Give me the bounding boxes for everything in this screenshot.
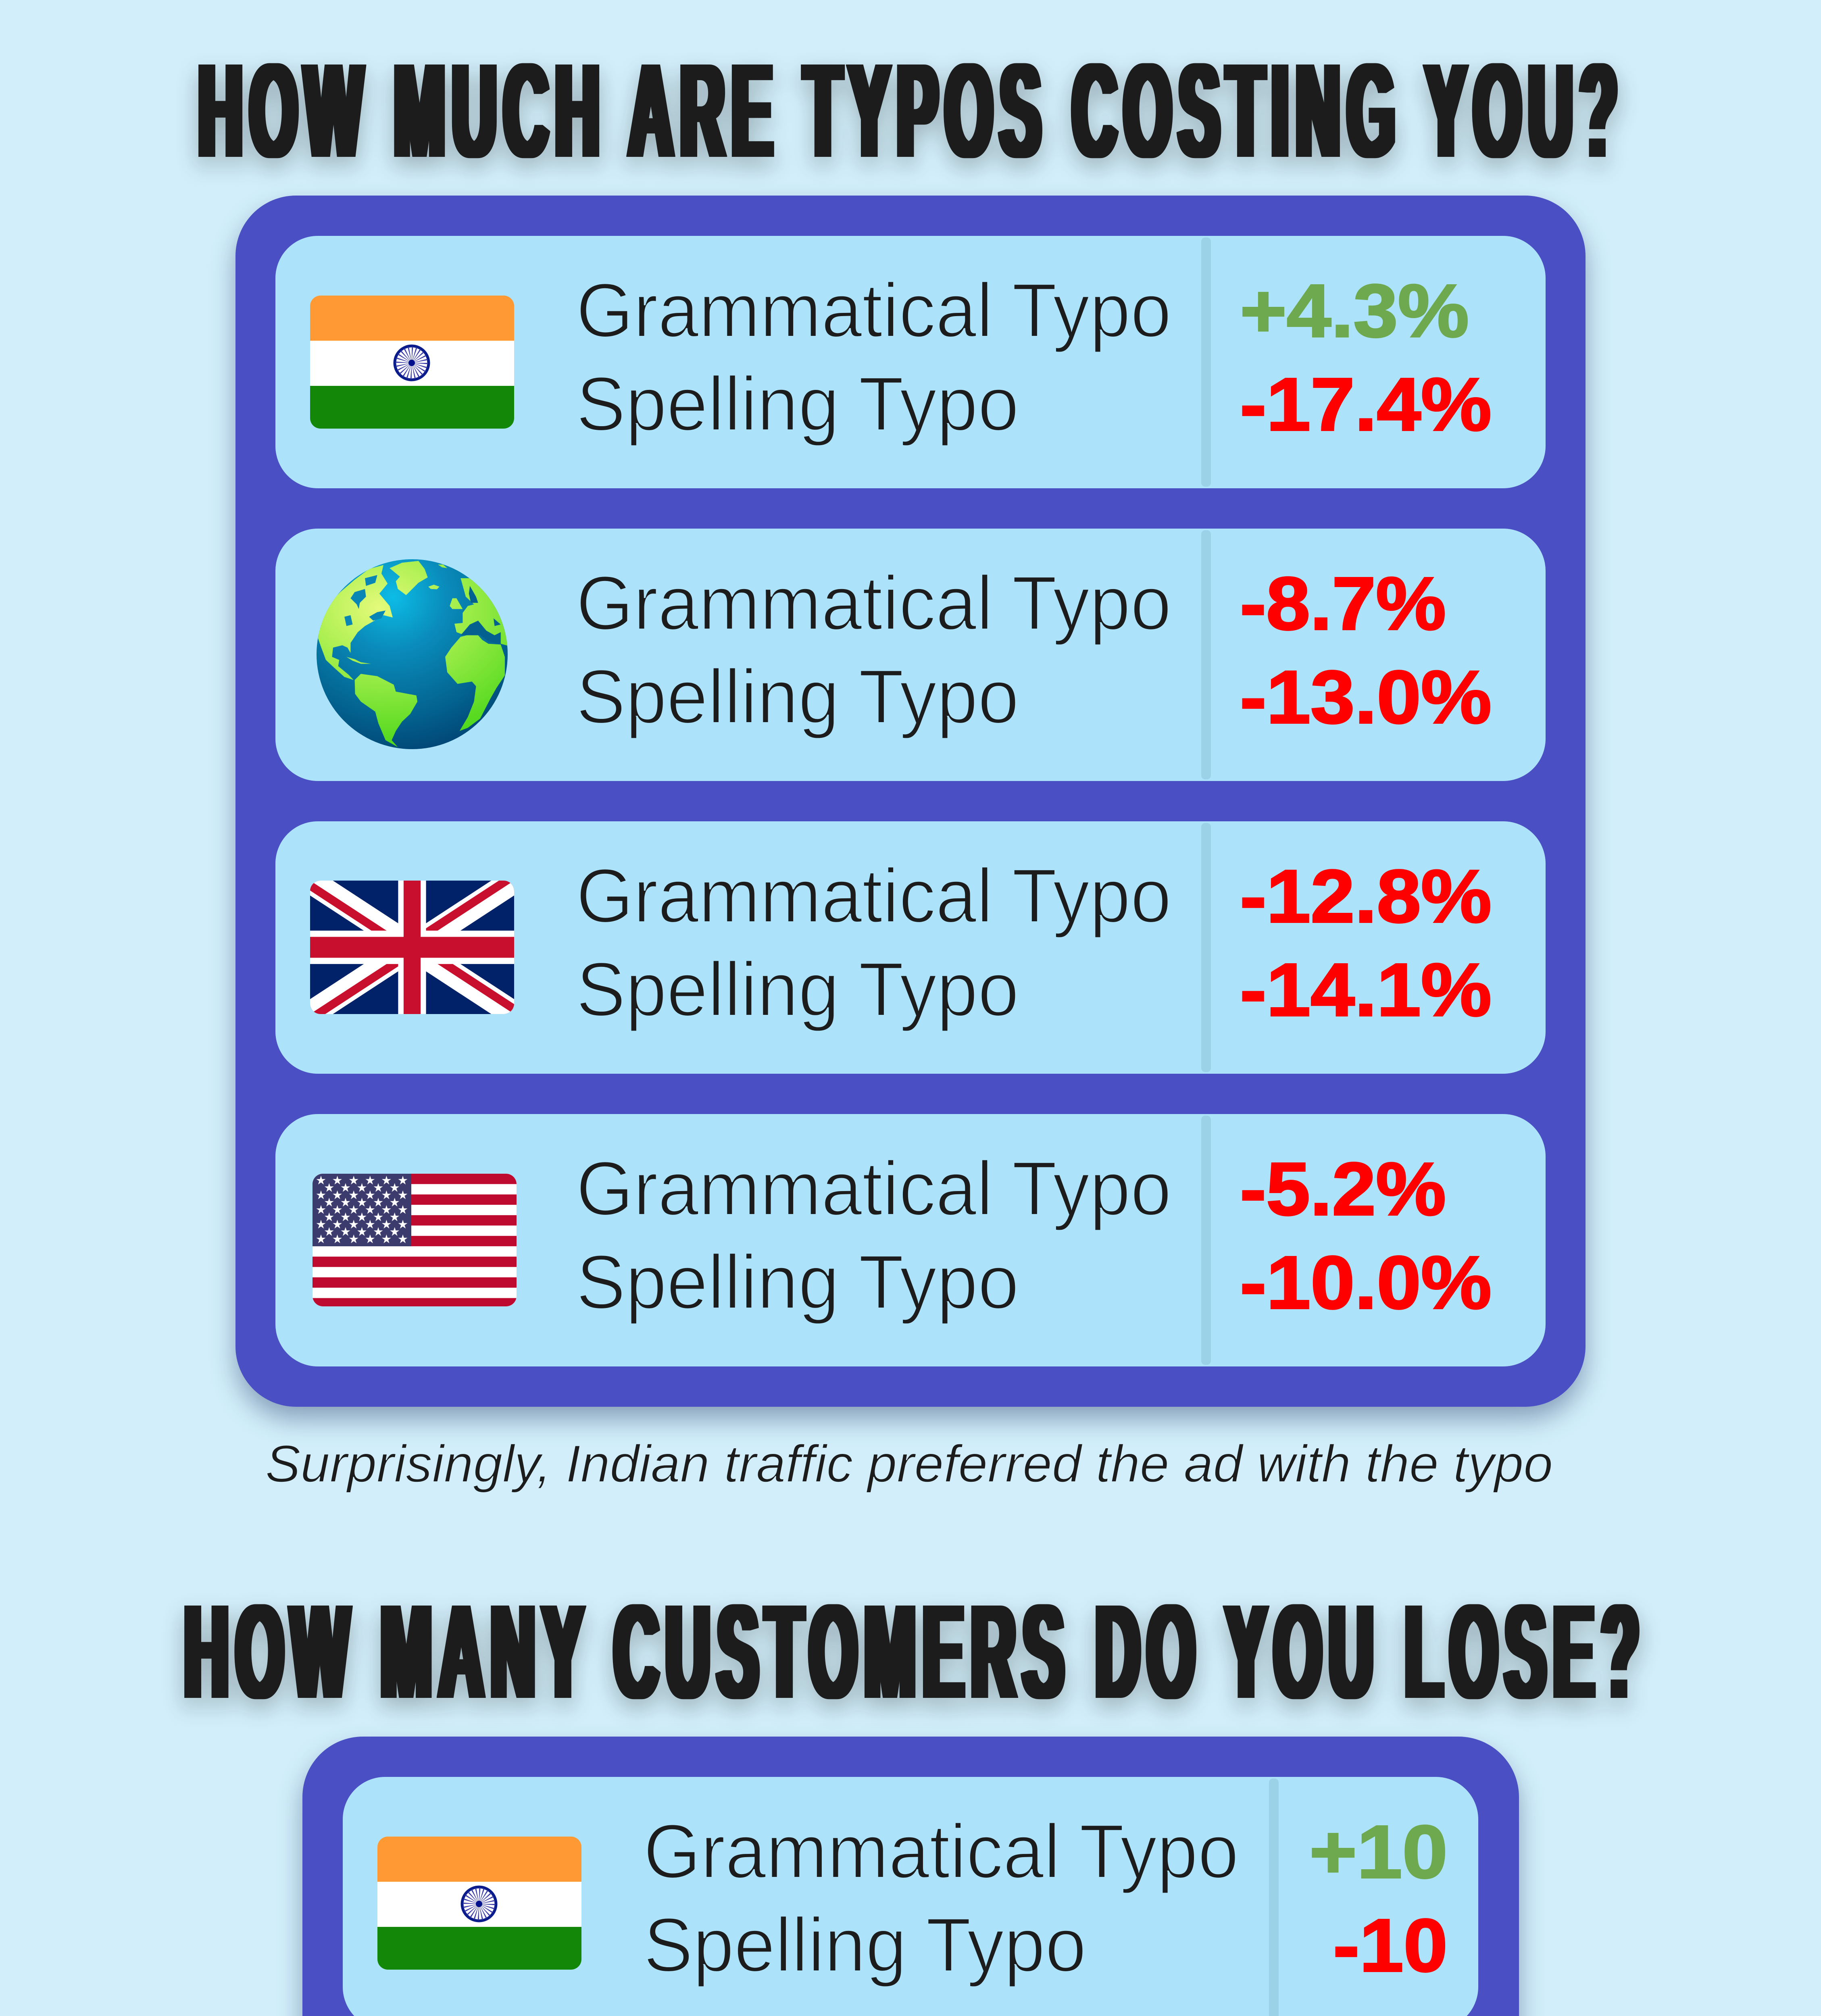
label: spelling typo: Spelling Typo	[644, 1902, 1086, 1988]
icon: USA flag	[313, 1173, 517, 1308]
label: grammatical typo: Grammatical Typo	[576, 853, 1171, 939]
icon: UK flag	[310, 881, 514, 1014]
icon: India flag	[377, 1837, 581, 1970]
value: India grammatical: +10	[1309, 1810, 1448, 1894]
value: India spelling: -17.4%	[1240, 363, 1492, 446]
label: spelling typo: Spelling Typo	[576, 1239, 1019, 1325]
value: global grammatical: -8.7%	[1240, 562, 1446, 646]
value: UK spelling: -14.1%	[1240, 948, 1492, 1032]
panel: customers lost	[302, 1737, 1519, 2016]
panel: typo cost percentages	[235, 196, 1586, 1407]
caption: Indian traffic note: Surprisingly, Indian traffic preferred the ad with the typo	[265, 1434, 1553, 1493]
label: grammatical typo: Grammatical Typo	[576, 268, 1171, 353]
icon: India flag	[310, 296, 514, 429]
value: USA spelling: -10.0%	[1240, 1241, 1492, 1325]
card: India customers	[343, 1777, 1478, 2016]
card: Global percentages	[275, 529, 1546, 781]
label: spelling typo: Spelling Typo	[576, 947, 1019, 1032]
label: spelling typo: Spelling Typo	[576, 361, 1019, 447]
card: USA percentages	[275, 1114, 1546, 1366]
value: global spelling: -13.0%	[1240, 656, 1492, 739]
label: spelling typo: Spelling Typo	[576, 654, 1019, 739]
label: grammatical typo: Grammatical Typo	[576, 1146, 1171, 1231]
value: UK grammatical: -12.8%	[1240, 855, 1492, 938]
label: grammatical typo: Grammatical Typo	[576, 560, 1171, 646]
icon: globe	[317, 559, 509, 749]
value: USA grammatical: -5.2%	[1240, 1148, 1446, 1231]
label: grammatical typo: Grammatical Typo	[644, 1809, 1239, 1894]
card: India percentages	[275, 236, 1546, 488]
value: India spelling: -10	[1333, 1904, 1448, 1987]
value: India grammatical: +4.3%	[1240, 269, 1469, 353]
card: UK percentages	[275, 821, 1546, 1074]
